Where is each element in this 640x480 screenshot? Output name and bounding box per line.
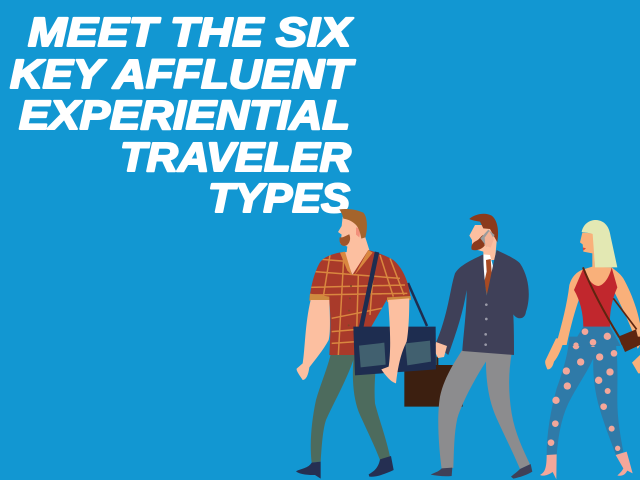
- figure: blonde woman with polka-dot leggings: [540, 220, 640, 479]
- plaid shirt: [309, 250, 411, 355]
- title: EXPERIENTIAL: [19, 92, 350, 138]
- head, phone and suit jacket: [435, 214, 529, 355]
- head, arms and red top: [556, 220, 640, 349]
- title: TYPES: [208, 175, 350, 221]
- leggings with dots: [540, 337, 633, 479]
- briefcase: [404, 357, 463, 407]
- title: MEET THE SIX: [28, 9, 354, 55]
- figure: man on phone with briefcase: [404, 214, 532, 479]
- messenger bag with pockets: [353, 327, 436, 375]
- hands and small bag bottom: [545, 337, 640, 373]
- figure: man in plaid shirt with messenger bag: [296, 209, 436, 479]
- title: TRAVELER: [120, 134, 351, 180]
- arms and hands: [297, 298, 409, 383]
- grey trousers and shoes: [431, 348, 532, 479]
- title: [10, 9, 355, 221]
- head and neck: [338, 209, 369, 275]
- bag back strap: [408, 283, 427, 326]
- green trousers and boots: [296, 347, 394, 479]
- hand holding briefcase: [434, 342, 447, 358]
- bag front strap: [361, 252, 377, 328]
- leggings dots on hip: [572, 327, 621, 348]
- title: KEY AFFLUENT: [10, 51, 355, 97]
